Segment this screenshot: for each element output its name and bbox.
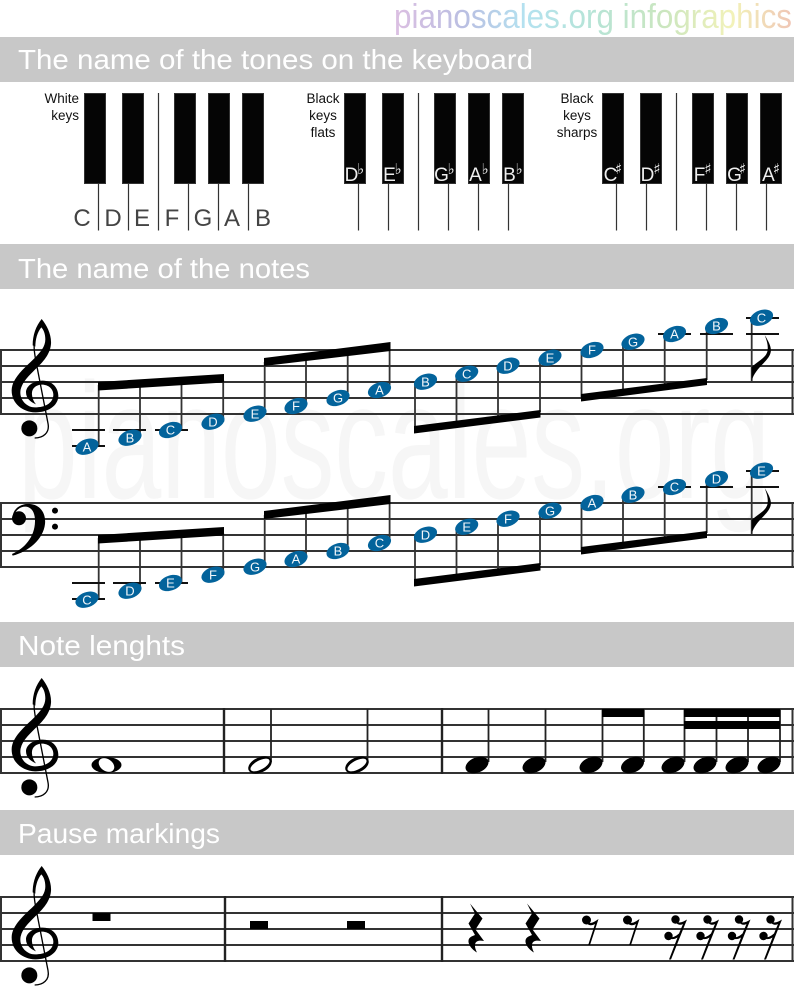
- whole rest: [92, 913, 110, 921]
- bass staff with named notes: [0, 460, 794, 611]
- section heading: tones on the keyboard: The name of the tones on the keyboard: [18, 44, 533, 75]
- flat key names: G: [434, 165, 449, 186]
- panel: black keys flats: [306, 91, 524, 230]
- ledger lines: [72, 318, 779, 446]
- bass note heads: A: [588, 496, 597, 510]
- eighth rests: [582, 916, 640, 945]
- treble note heads: A: [375, 382, 384, 398]
- icon: bass clef: [12, 504, 58, 556]
- bass note heads: F: [209, 568, 217, 582]
- bass note heads: D: [421, 528, 430, 542]
- flat key names: ♭: [394, 160, 402, 178]
- bass note heads: [73, 460, 775, 611]
- treble note heads: E: [546, 350, 555, 366]
- section heading: pause markings: Pause markings: [18, 818, 220, 849]
- section heading: note lengths: [0, 622, 794, 667]
- white keys label: White: [44, 91, 79, 106]
- treble note heads: E: [251, 406, 260, 422]
- flats label: flats: [311, 125, 336, 140]
- sharp key names: ♯: [615, 160, 622, 178]
- bass note heads: C: [670, 480, 679, 494]
- note lengths staff: [0, 678, 794, 797]
- quarter notes: [463, 709, 548, 776]
- stems, beams and flag: [98, 471, 771, 600]
- eighth notes: [577, 709, 646, 776]
- sharps label: [557, 91, 598, 140]
- treble staff with named notes: [0, 307, 794, 458]
- bass note heads: C: [82, 592, 92, 608]
- icon: treble clef: [12, 319, 58, 438]
- bass note heads: D: [712, 472, 721, 486]
- flats label: Black: [306, 91, 340, 106]
- treble note heads: G: [628, 334, 638, 350]
- half notes: [246, 709, 371, 777]
- bass note heads: E: [757, 464, 766, 478]
- treble note heads: C: [166, 422, 175, 438]
- treble note heads: F: [292, 398, 300, 414]
- treble note heads: B: [126, 430, 134, 446]
- sixteenth rests: [664, 915, 782, 960]
- treble note heads: B: [712, 318, 721, 334]
- flat key names: ♭: [515, 160, 523, 178]
- flat key names: [345, 160, 523, 186]
- sharp key names: ♯: [653, 160, 661, 178]
- white key note names: B: [255, 205, 271, 232]
- sharp key names: ♯: [773, 160, 780, 178]
- quarter rests: [468, 904, 541, 952]
- treble note heads: D: [208, 414, 218, 430]
- sharp keys: [602, 94, 782, 184]
- bass note heads: A: [292, 552, 301, 566]
- flat key names: ♭: [357, 160, 364, 178]
- flat key names: D: [345, 165, 358, 186]
- sharps label: Black: [560, 91, 594, 106]
- bass note heads: B: [629, 488, 637, 502]
- sharp key names: G: [727, 165, 742, 186]
- treble note heads: B: [421, 374, 430, 390]
- flat key names: A: [469, 165, 482, 186]
- treble note heads: C: [757, 310, 766, 326]
- treble note heads: A: [83, 440, 92, 454]
- sharp key names: ♯: [739, 160, 746, 178]
- bass note heads: E: [166, 576, 175, 590]
- bass note heads: G: [250, 560, 260, 574]
- white key note names: D: [104, 205, 122, 232]
- flat keys: [344, 94, 524, 184]
- flat key names: ♭: [447, 160, 455, 178]
- icon: treble clef: [12, 866, 58, 985]
- white keys label: [44, 91, 79, 123]
- section heading: notes: The name of the notes: [18, 253, 310, 284]
- pause markings staff: [0, 866, 794, 985]
- flat key names: B: [503, 165, 516, 186]
- treble note heads: D: [503, 358, 513, 374]
- white key note names: E: [134, 205, 150, 232]
- white key note names: A: [224, 205, 240, 232]
- section heading: note lengths: Note lenghts: [18, 630, 185, 661]
- bass note heads: G: [545, 504, 555, 518]
- sharp key names: ♯: [704, 160, 712, 178]
- sharps label: sharps: [557, 125, 598, 140]
- ledger lines: [72, 471, 779, 599]
- white key note names: F: [165, 205, 179, 232]
- flats label: [306, 91, 340, 140]
- bass note heads: D: [125, 584, 135, 598]
- sixteenth notes: [659, 709, 783, 776]
- white key note names: C: [73, 205, 91, 232]
- half rests: [250, 921, 365, 929]
- treble note heads: A: [670, 326, 679, 342]
- panel: white keys: [44, 91, 271, 232]
- white key note names: G: [194, 205, 212, 232]
- stems, beams and flag: [98, 318, 771, 447]
- white keys label: keys: [51, 108, 79, 123]
- sharp key names: D: [641, 165, 654, 186]
- white key note names: [73, 205, 271, 232]
- flats label: keys: [309, 108, 337, 123]
- sharps label: keys: [563, 108, 591, 123]
- bass note heads: F: [504, 512, 512, 526]
- treble note heads: [73, 307, 775, 458]
- panel: black keys sharps: [557, 91, 782, 230]
- sharp key names: [604, 160, 780, 186]
- treble note heads: C: [462, 366, 471, 382]
- black keys of the white key diagram: [84, 94, 264, 184]
- treble note heads: G: [333, 390, 343, 406]
- section heading: tones on the keyboard: [0, 37, 794, 82]
- bass note heads: E: [462, 520, 471, 534]
- icon: treble clef: [12, 678, 58, 797]
- flat key names: ♭: [481, 160, 489, 178]
- treble note heads: F: [588, 342, 596, 358]
- sharp key names: A: [762, 165, 775, 186]
- bass note heads: B: [334, 544, 342, 558]
- flat key names: E: [383, 165, 396, 186]
- section heading: notes: [0, 244, 794, 289]
- sharp key names: C: [604, 165, 617, 186]
- sharp key names: F: [694, 165, 705, 186]
- whole note: [92, 755, 122, 775]
- section heading: pause markings: [0, 810, 794, 855]
- bass note heads: C: [375, 536, 384, 550]
